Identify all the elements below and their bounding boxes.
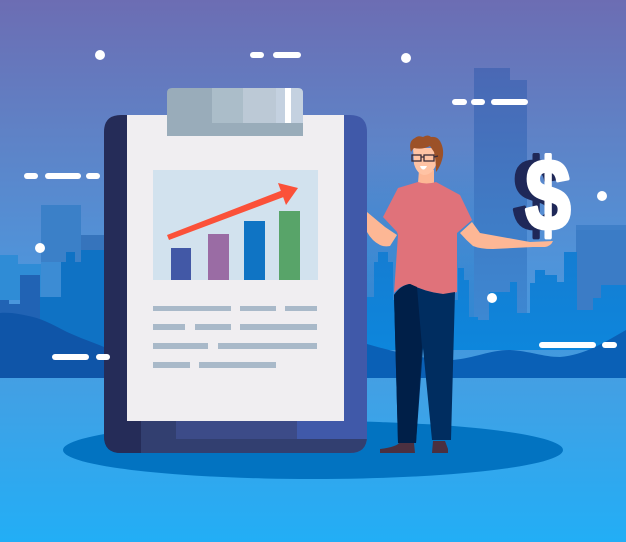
metal clip xyxy=(167,88,303,136)
man xyxy=(367,136,553,453)
shirt xyxy=(383,182,472,294)
shoes xyxy=(380,443,415,453)
trend arrow xyxy=(167,183,298,240)
hills xyxy=(0,313,626,380)
background sky xyxy=(0,0,626,380)
head xyxy=(413,148,437,175)
left arm xyxy=(367,212,397,246)
paper sheet xyxy=(127,115,344,421)
hair xyxy=(410,136,443,172)
dollar icon: $ xyxy=(525,140,571,252)
clipboard xyxy=(104,88,367,453)
document text lines xyxy=(153,306,317,368)
right arm xyxy=(460,222,553,249)
smile xyxy=(420,166,427,170)
neck xyxy=(418,170,434,185)
decorative dots and dashes xyxy=(24,50,617,360)
dollar icon: $ xyxy=(513,140,559,252)
trouser shadow xyxy=(394,284,422,443)
glasses xyxy=(412,155,438,161)
clipboard board xyxy=(104,115,127,453)
skyline: near buildings xyxy=(0,250,626,350)
bar chart xyxy=(153,170,318,280)
trousers xyxy=(394,284,455,443)
skyline: far buildings xyxy=(41,68,626,320)
ground xyxy=(0,378,626,542)
shadow ellipse xyxy=(63,421,563,479)
